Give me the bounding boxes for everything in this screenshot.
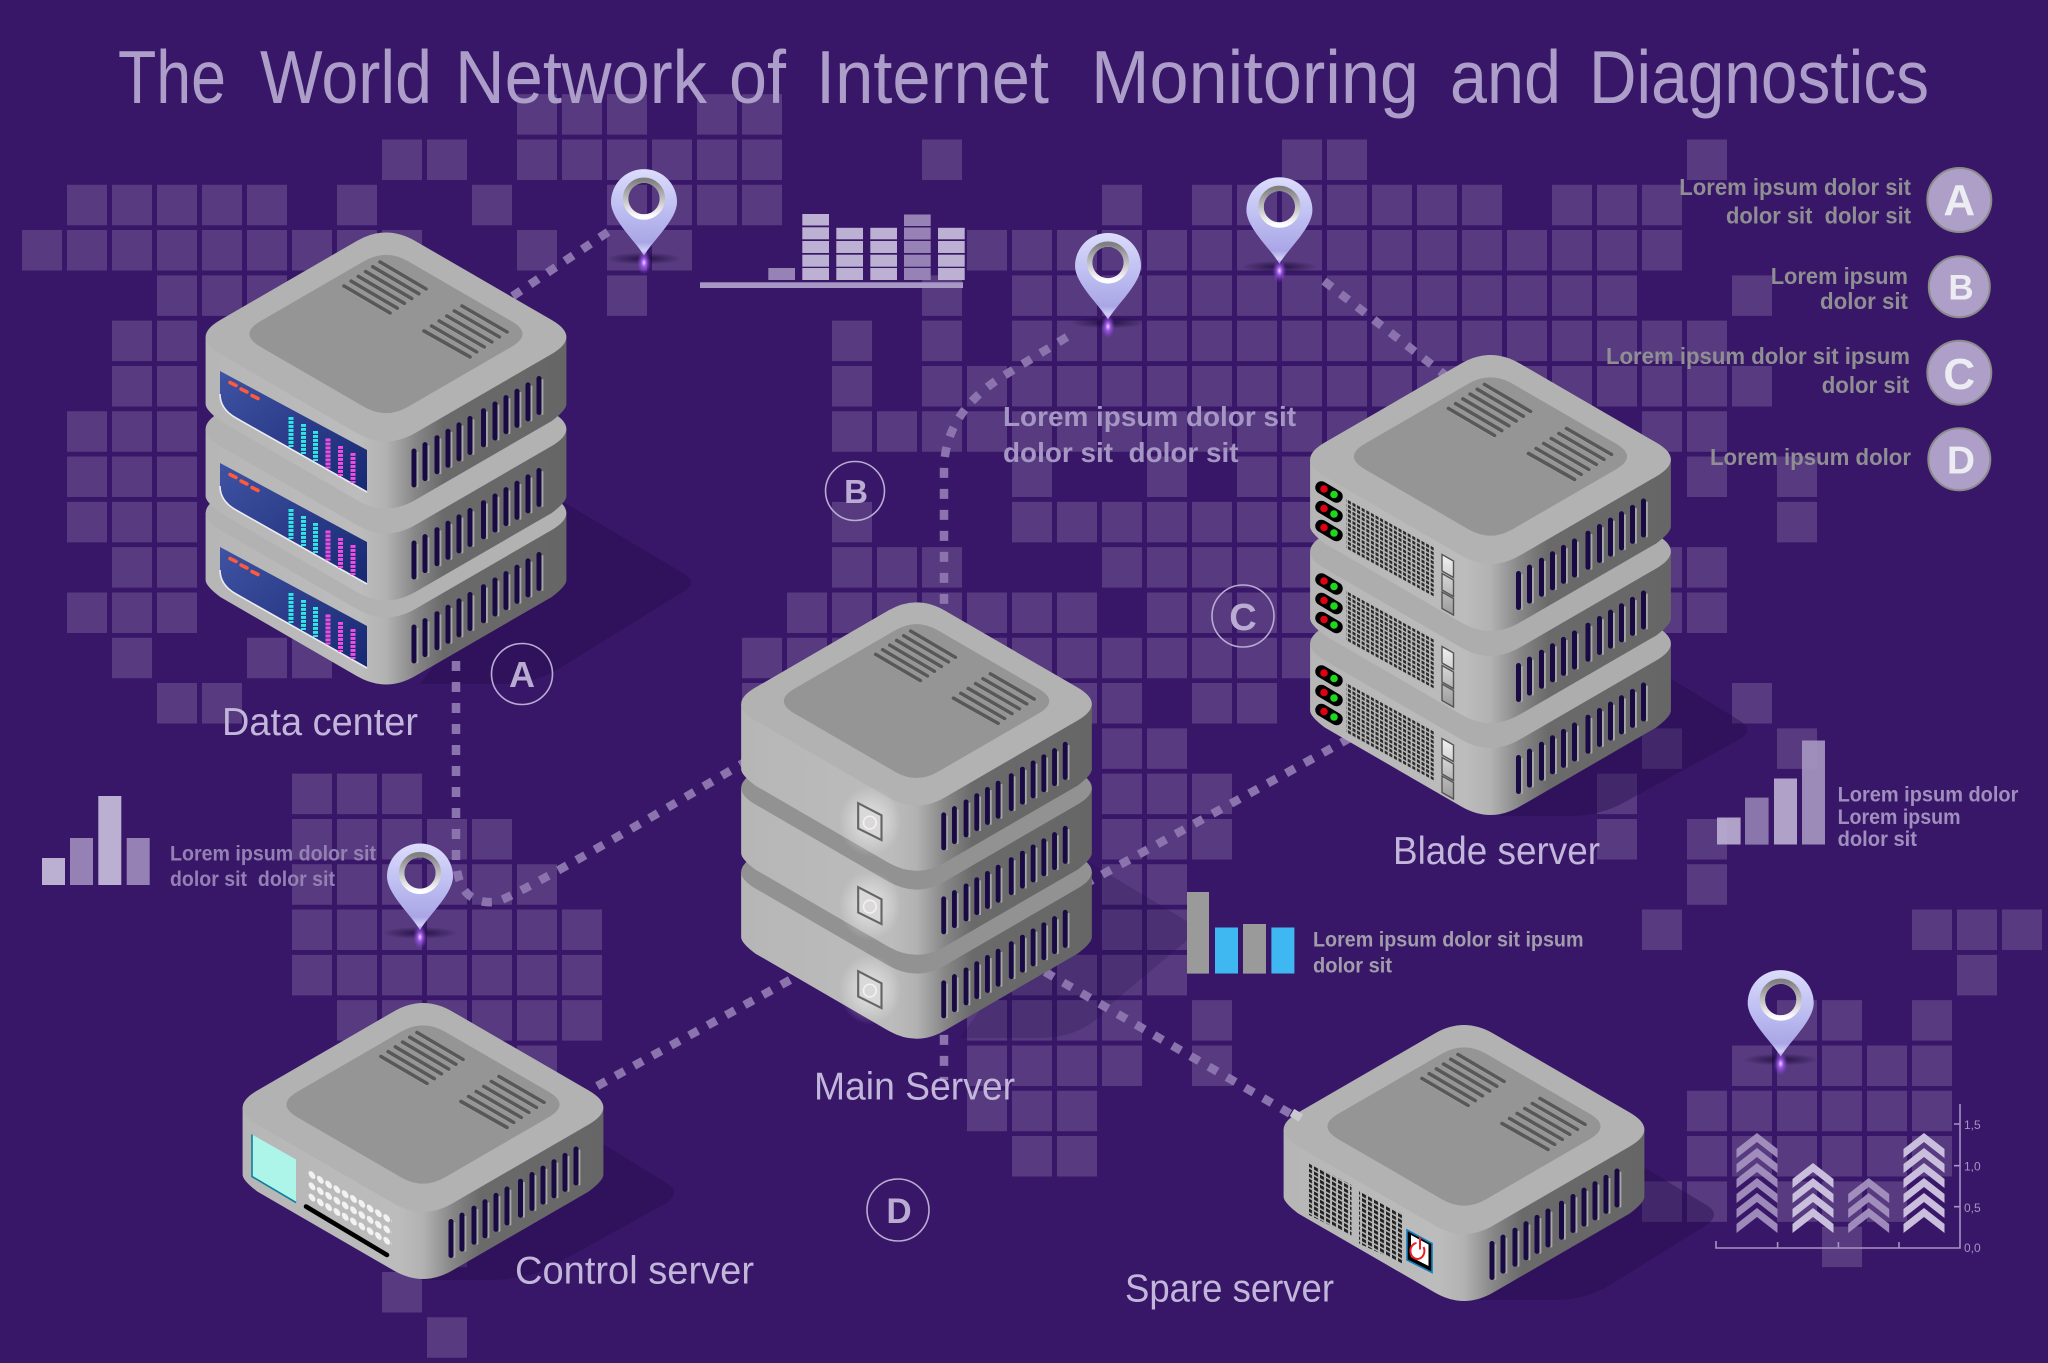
server: blade server xyxy=(1310,355,1671,815)
server drop shadows xyxy=(420,500,1747,1300)
legend entry C: Lorem ipsum dolor sit ipsum xyxy=(1606,343,1910,369)
chevron chart with axis xyxy=(1716,1104,1981,1255)
marker circle A: A xyxy=(509,654,535,695)
chevron chart with axis: 1,5 xyxy=(1964,1118,1981,1132)
server: data center xyxy=(206,232,566,685)
label: control server: Control server xyxy=(515,1250,754,1292)
text: center caption: Lorem ipsum dolor sit xyxy=(1003,401,1296,432)
text: center caption: dolor sit dolor sit xyxy=(1003,437,1239,468)
marker circle D xyxy=(867,1179,929,1241)
text: right bar chart caption xyxy=(1838,784,2018,851)
legend entry B: Lorem ipsum xyxy=(1771,263,1908,289)
marker circle A xyxy=(492,644,552,704)
label: data center: Data center xyxy=(222,701,418,744)
label: blade server: Blade server xyxy=(1393,830,1600,873)
title: The xyxy=(118,35,226,119)
last dash over spare server xyxy=(1292,1112,1301,1118)
server: control server xyxy=(243,1003,603,1279)
right bar chart xyxy=(1717,740,1825,845)
chevron chart with axis: 1,0 xyxy=(1964,1160,1981,1174)
title: of xyxy=(729,35,786,119)
text: gray blue bars caption: Lorem ipsum dolor sit ipsum xyxy=(1313,929,1584,952)
legend entry A: A xyxy=(1943,176,1975,225)
server: spare server xyxy=(1284,1025,1644,1301)
location pin 2 xyxy=(1070,233,1146,338)
legend entry A: dolor sit dolor sit xyxy=(1726,202,1911,228)
title xyxy=(118,35,1929,119)
text: right bar chart caption: Lorem ipsum dolor xyxy=(1838,784,2018,807)
title: Internet xyxy=(816,35,1049,119)
title: Network xyxy=(455,35,707,119)
legend entry D: Lorem ipsum dolor xyxy=(1710,444,1911,470)
marker circle C: C xyxy=(1229,597,1257,639)
dotted network connections xyxy=(456,232,1445,1117)
legend entry A: Lorem ipsum dolor sit xyxy=(1679,174,1911,200)
marker circle B xyxy=(826,462,884,520)
legend entry B: dolor sit xyxy=(1820,288,1908,314)
legend entry D: D xyxy=(1947,440,1975,482)
location pin 5 xyxy=(1743,970,1819,1076)
location pin 4 xyxy=(382,844,458,949)
legend entry C xyxy=(1606,341,1991,405)
gray and blue bar chart xyxy=(1187,892,1294,974)
location pin 3 xyxy=(1241,177,1317,283)
title: and xyxy=(1450,35,1561,119)
text: left bar chart caption: dolor sit dolor sit xyxy=(170,868,335,891)
text: right bar chart caption: dolor sit xyxy=(1838,828,1917,851)
server: main server xyxy=(741,602,1092,1039)
text: left bar chart caption xyxy=(170,842,376,891)
legend entry A xyxy=(1679,168,1991,232)
chevron chart with axis: 0,0 xyxy=(1964,1241,1981,1255)
legend entry B: B xyxy=(1948,268,1974,308)
text: gray blue bars caption xyxy=(1313,929,1584,977)
legend entry B xyxy=(1771,256,1990,317)
title: Monitoring xyxy=(1091,35,1419,119)
label: spare server: Spare server xyxy=(1125,1268,1334,1310)
title: Diagnostics xyxy=(1589,35,1929,119)
text: center caption xyxy=(1003,401,1296,468)
location pin 1 xyxy=(606,169,682,275)
legend entry D xyxy=(1710,428,1990,490)
chevron chart with axis: 0,5 xyxy=(1964,1201,1981,1215)
legend entry C: C xyxy=(1943,350,1975,399)
title: World xyxy=(260,35,432,119)
label: main server: Main Server xyxy=(814,1066,1015,1108)
equalizer bar chart xyxy=(700,214,965,288)
legend entry C: dolor sit xyxy=(1822,372,1910,398)
text: right bar chart caption: Lorem ipsum xyxy=(1838,806,1960,829)
marker circle B: B xyxy=(844,473,868,510)
marker circle C xyxy=(1212,585,1274,647)
text: left bar chart caption: Lorem ipsum dolor sit xyxy=(170,842,376,866)
marker circle D: D xyxy=(886,1192,912,1231)
text: gray blue bars caption: dolor sit xyxy=(1313,954,1392,977)
left bar chart xyxy=(42,796,150,885)
